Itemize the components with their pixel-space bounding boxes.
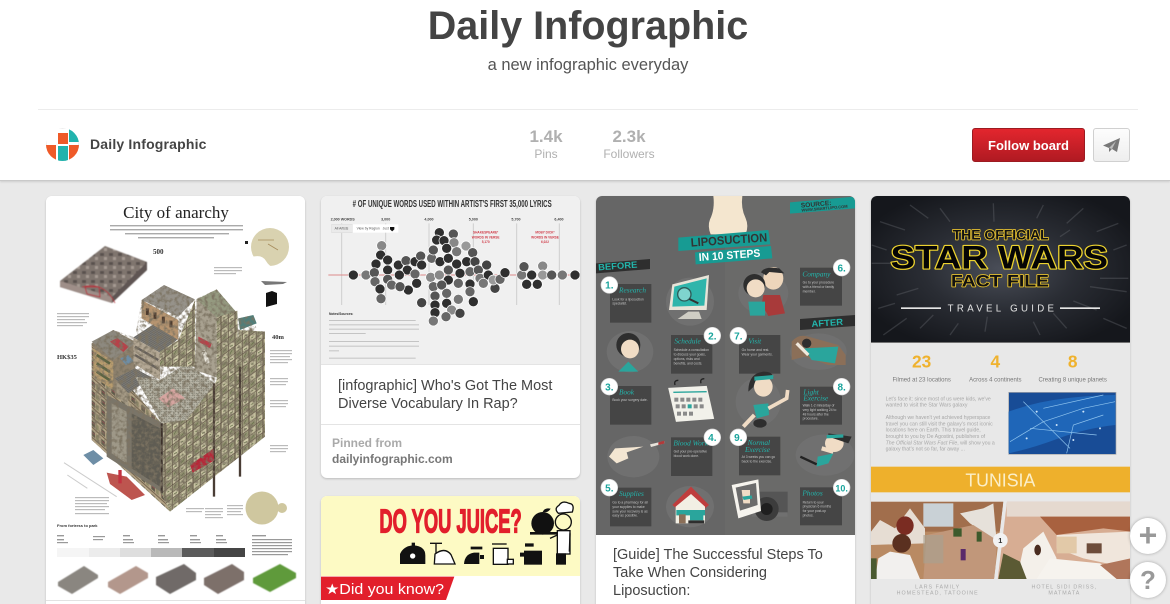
infographic: Do you juice [321,496,580,600]
icon: paper plane [1103,138,1120,152]
timeline band [57,548,245,557]
miniature of the walled city [60,246,147,303]
pin card: vocabulary in rap [321,196,580,478]
illustration: pointing hand [607,436,664,477]
callout: Moby Dick: WORDS IN VERSE [531,235,559,239]
illustration: house [666,486,714,527]
step descriptions: very light walking 24 to [803,408,836,412]
step titles: Schedule [674,337,702,346]
filter tabs: All Artists [335,227,349,231]
isometric cutaway building [64,280,270,517]
pinned from source: dailyinfographic.com [332,452,453,466]
icon: masticating juicer [430,543,455,564]
step titles: Book [619,387,635,396]
callout: Shakespeare: WORDS IN VERSE [472,235,500,239]
photo caption left [897,584,979,597]
icon: press [520,543,542,565]
stat: 4: 4 [991,352,1001,372]
icon: apple on tray [530,508,560,535]
intro copy (illegible micro text) [110,225,243,238]
heading: City of anarchy: City of anarchy [123,203,229,222]
step descriptions: physician 6 months [803,505,831,509]
callout: Shakespeare: SHAKESPEARE* [473,231,499,235]
step titles: Visit [748,337,762,346]
banner text: ★Did you know? [325,582,444,598]
illustration: monitor with magnifier [666,275,714,326]
axis labels: 3,000 [381,217,390,221]
step titles: Normal [747,438,770,447]
floating help button: ? [1140,565,1156,595]
ribbon: after [800,315,855,330]
stat: followers: Followers [603,147,655,161]
pin card: Star Wars travel guide [871,196,1130,604]
body figure [709,196,747,234]
floating add button [1130,518,1166,554]
galaxy map [1009,392,1116,454]
step descriptions: Book your surgery date. [612,398,648,402]
badge numerals: 10. [835,483,848,493]
photo: Hotel Sidi Driss [997,502,1131,579]
icon: meat grinder [464,547,484,564]
divider [38,109,1138,110]
intro paragraph: galaxy that's not so far, far away ... [886,446,965,452]
floating add button: + [1139,517,1157,553]
logo: The Official: THE OFFICIAL [953,227,1049,243]
step titles: Blood Work [673,439,709,448]
stat: followers: 2.3k [612,127,646,146]
step descriptions: your supplies to make [612,505,645,509]
photo caption left: LARS FAMILY [915,584,960,590]
step titles: Photos [801,489,823,498]
section band: Tunisia [870,467,1131,492]
infographic: vocabulary chart [321,196,580,364]
banner: Did you know [320,577,454,600]
filter tabs: Just [383,227,389,231]
step descriptions: with a friend or family [803,285,834,289]
baseline [328,274,580,276]
stat captions: Filmed at 23 locations [892,377,951,383]
logo: Star Wars: STAR WARS [891,239,1108,276]
page header [0,0,1170,181]
icon: chef legs [556,553,566,565]
callout: Moby Dick: MOBY DICK* [535,231,555,235]
notes copy (illegible micro text) [329,320,419,359]
intro paragraph: wanted to visit the Star Wars galaxy [886,403,968,409]
section title: TUNISIA [965,471,1035,491]
badge numerals: 7. [734,331,743,342]
step descriptions: At 3 weeks you can go [742,455,775,459]
source ribbon: WWW.SMARTLIPO.COM [801,204,848,213]
ribbon: before: BEFORE [598,260,638,272]
step descriptions: benefits, and costs. [674,361,702,365]
axis labels: 5,700 [511,217,521,221]
floating help button [1130,562,1166,598]
photo caption right: MATMATA [1048,591,1080,597]
pin description: [Guide] The Successful Steps To Take When Considering Liposuction: [613,547,823,599]
logo: Fact File: FACT FILE [951,272,1049,291]
intro paragraph: Although we haven't yet achieved hyperspace [886,415,991,421]
step descriptions: Go home and rest. [742,348,769,352]
step descriptions: photos. [803,513,814,517]
illustration: couple [738,267,788,316]
rule left [901,307,941,309]
badge numerals: 3. [605,382,614,393]
map circle [245,228,289,267]
step descriptions [612,281,836,518]
illustration: exercising woman [796,433,854,476]
step descriptions: Go to a pharmacy for all [612,501,648,505]
board name: Daily Infographic [90,136,207,152]
intro paragraph: Let's face it: since most of us were kids, we've [886,396,991,402]
pin title: [infographic] Who's Got The Most Diverse Vocabulary In Rap? [338,378,552,412]
badge numerals: 2. [708,331,717,342]
ribbon: after: AFTER [811,317,844,329]
axis labels: 2,000 WORDS [331,217,355,221]
section heading: from fortress to park: From fortress to park [57,523,98,528]
step titles: Research [618,286,646,295]
icon: board avatar [46,128,79,161]
title: Daily Infographic [428,4,748,48]
step titles: Exercise [744,445,771,454]
step descriptions: options, risks and [674,357,700,361]
callout: Shakespeare [472,231,500,244]
intro paragraph [886,396,995,452]
badge numerals: 4. [708,433,717,444]
stat captions: Across 4 continents [969,377,1022,383]
step descriptions: specialist. [612,302,627,306]
step titles: Light [802,387,820,396]
icon: juicer one [400,543,425,564]
callout: 500: 500 [153,248,164,256]
intro paragraph: travel you can still visit the galaxy's most iconic [886,422,993,428]
subtitle: a new infographic everyday [488,56,688,74]
step descriptions: Return to your [803,500,825,504]
step descriptions: Look for a liposuction [612,297,644,301]
number badges [601,259,850,496]
photo caption right [1032,584,1097,597]
step descriptions: Schedule a consultation [674,348,709,352]
filter tabs [332,224,398,233]
callout: Shakespeare: 5,170 [482,240,490,244]
stat captions: Creating 8 unique planets [1038,377,1107,383]
photo caption left: HOMESTEAD, TATOOINE [897,591,979,597]
illustration: patient in bed [790,333,847,370]
stat captions [892,377,1107,383]
step descriptions: Wear your garments. [742,353,773,357]
stat: pins: 1.4k [529,127,563,146]
illustration: running woman [736,372,788,428]
photo: Lars family homestead [870,502,1007,579]
illustration: woman on phone [607,331,653,372]
step descriptions: Get your pre-operative [674,450,707,454]
pin card: City of anarchy [46,196,305,604]
callout: Moby Dick: 6,022 [541,240,549,244]
side notes (illegible micro text) [57,267,292,452]
step descriptions: Go to your procedure [803,281,834,285]
title ribbon: in 10 steps: IN 10 STEPS [698,248,761,264]
icon: black silhouette [266,291,277,307]
step titles: Exercise [802,394,829,403]
notes under building (illegible micro text) [75,497,243,518]
axis labels [331,217,564,221]
step descriptions: to discuss your goals, [674,353,706,357]
step descriptions: easy as possible. [612,514,638,518]
send button [1093,128,1130,162]
step descriptions: sure your recovery is as [612,509,648,513]
rule right [1060,307,1100,309]
label: 40m: 40m [272,334,284,341]
intro paragraph: locations here on Earth. This travel guide, [886,428,981,434]
illustration: calendar [668,379,714,422]
step descriptions: 48 hours after the [803,412,829,416]
infographic: liposuction in 10 steps [596,196,855,535]
label: HK$35: HK$35 [57,354,78,361]
step descriptions: blood work done. [674,454,699,458]
step descriptions: Walk 1-2 miles/day of [803,404,834,408]
step titles: Supplies [619,489,644,498]
step boxes [610,268,842,526]
follow board button [972,128,1085,162]
artist portraits swarm [348,228,580,326]
pin card: liposuction [596,196,855,604]
source ribbon [790,197,855,214]
pinned from source: Pinned from [332,436,402,450]
step descriptions: procedure. [803,417,819,421]
axis labels: 4,000 [424,217,434,221]
stat: 23: 23 [912,352,932,372]
callout: Moby Dick [531,231,559,244]
notes heading: Notes/Sources: [329,312,353,316]
step descriptions: back to the exercise. [742,459,772,463]
pin description [321,364,580,425]
step descriptions: for your post-op [803,509,826,513]
step titles: Company [802,270,831,279]
starfield header [870,195,1131,343]
source ribbon: SOURCE: [801,200,832,210]
infographic: City of anarchy [46,200,305,601]
photo caption right: HOTEL SIDI DRISS, [1032,584,1097,590]
axis lines [342,223,559,305]
step descriptions: member. [803,289,816,293]
stat: pins: Pins [534,147,558,161]
intro paragraph: The Official Star Wars Fact File, will show you a [886,440,995,446]
badge numerals: 9. [734,433,743,444]
development stages [58,564,296,594]
badge numerals [605,263,848,494]
location badge [993,533,1008,548]
badge numerals: 6. [837,263,846,274]
timeline labels (illegible micro text) [57,535,292,555]
ribbon: before [596,259,650,273]
icon: chef [550,502,573,554]
badge numerals: 1. [605,281,614,292]
travel guide label: TRAVEL GUIDE [948,303,1055,314]
stat: followers [603,127,655,161]
axis labels: 6,400 [554,217,564,221]
step titles [618,270,831,498]
intro paragraph: brought to you by De Agostini, publishers of [886,434,986,440]
filter tabs: View by Region [357,227,380,231]
location badge: 1 [998,536,1002,545]
icon: plane [261,281,287,285]
stat: pins [529,127,563,161]
badge numerals: 8. [837,382,846,393]
illustration: polaroid and camera [732,479,788,521]
badge numerals: 5. [605,483,614,494]
follow board button: Follow board [988,138,1069,153]
icon: blender juicer [492,544,513,564]
title ribbon: Liposuction: LIPOSUCTION [690,230,768,250]
infographic: Star Wars fact file [871,196,1130,604]
stat: 8: 8 [1068,352,1078,372]
pinned from source [332,436,453,466]
population circles [234,492,287,524]
pin card: Do you juice [321,496,580,604]
axis labels: 5,000 [469,217,478,221]
